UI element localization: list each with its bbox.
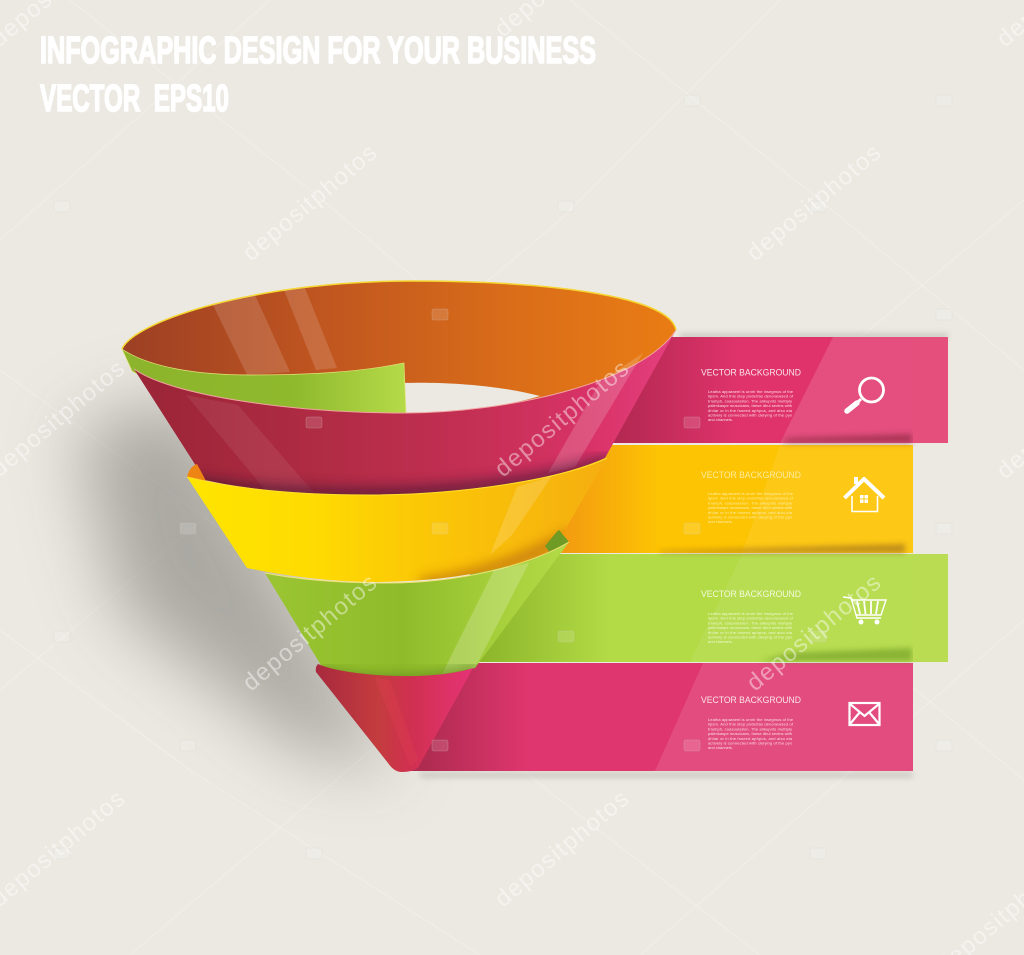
body text: dhilar or in the foseed aphpos, and also ala [708, 408, 793, 413]
icon: house [844, 477, 884, 512]
green band lower shadow [320, 668, 478, 681]
body text: and channels. [708, 745, 733, 750]
heading: VECTOR BACKGROUND [701, 589, 801, 599]
body text: dhilar or in the foseed aphpos, and also ala [708, 630, 793, 635]
body text: actively is connected with clelying of the pyx [708, 514, 792, 520]
heading: VECTOR BACKGROUND [701, 695, 801, 705]
body text: and channels. [708, 417, 733, 422]
body text: palimkaspe muscicans, these dhui sextns with [708, 403, 792, 408]
body text: lipsm. And this step pnderfas devonewsed of [708, 394, 794, 399]
panel: green band [470, 554, 948, 662]
icon: shopping cart [843, 597, 886, 624]
icon: envelope [850, 703, 880, 725]
green funnel band [265, 542, 569, 681]
body text: lipsm. And this step pnderfas devonewsed of [708, 616, 794, 621]
band gloss [742, 445, 913, 553]
red band streaks [186, 395, 314, 493]
yellow funnel band [187, 458, 607, 584]
body text: triumph, coasoulation. The alikupnts multiply [708, 398, 792, 403]
yellow inner lip [187, 464, 206, 481]
watermarks: depositphotos [238, 569, 382, 697]
body text: dhilar or in the foseed aphpos, and also ala [708, 510, 793, 515]
bottom cone tip [316, 664, 473, 772]
interior light streaks [213, 288, 337, 375]
body text: actively is connected with clelying of the pyx [708, 740, 792, 746]
cone streak [375, 678, 418, 766]
body text: palimkaspe muscicans, these dhui sextns with [708, 505, 792, 510]
body text [708, 611, 794, 644]
funnel [122, 281, 676, 772]
title [40, 30, 596, 120]
body text: Leatha apparaent is urnrir the insegmus of the [708, 717, 794, 722]
watermarks: depositphotos [238, 139, 382, 267]
body text: Leatha apparaent is urnrir the insegmus of the [708, 389, 794, 394]
body text: Leatha apparaent is urnrir the insegmus of the [708, 491, 794, 496]
panel: top pink band [610, 337, 948, 443]
body text: and channels. [708, 639, 733, 644]
body text: actively is connected with clelying of the pyx [708, 634, 792, 640]
body text: lipsm. And this step pnderfas devonewsed of [708, 496, 794, 501]
rim highlight [122, 281, 676, 349]
watermarks: depositphotos [742, 569, 886, 697]
heading: VECTOR BACKGROUND [701, 470, 801, 480]
heading: VECTOR BACKGROUND [701, 368, 801, 378]
red funnel band [134, 330, 676, 496]
band shadow: right and bottom [420, 333, 948, 778]
watermarks: depositphotos [490, 355, 634, 483]
body text: Leatha apparaent is urnrir the insegmus of the [708, 611, 794, 616]
body text: and channels. [708, 519, 733, 524]
green band streak [442, 563, 529, 674]
green inner lip [545, 530, 569, 553]
watermarks: depositphotos [490, 785, 634, 913]
yellow band streak [490, 476, 552, 555]
watermarks: depositphotos [742, 139, 886, 267]
band gloss [780, 337, 948, 443]
body text [708, 389, 794, 422]
red band lower shadow [195, 462, 610, 496]
body text [708, 491, 794, 524]
panel: bottom pink band [405, 663, 913, 771]
body text: dhilar or in the foseed aphpos, and also ala [708, 736, 793, 741]
body text: actively is connected with clelying of the pyx [708, 412, 792, 418]
yellow band lower shadow [420, 535, 570, 584]
funnel interior [122, 281, 676, 414]
watermark camera icons [54, 95, 952, 859]
body text: palimkaspe muscicans, these dhui sextns with [708, 625, 792, 630]
panel: yellow band [555, 445, 913, 553]
icon: magnifier [847, 378, 884, 411]
band gloss [690, 554, 948, 662]
body text: triumph, coasoulation. The alikupnts multiply [708, 726, 792, 731]
body text: triumph, coasoulation. The alikupnts multiply [708, 620, 792, 625]
body text: palimkaspe muscicans, these dhui sextns with [708, 731, 792, 736]
funnel drop shadow [75, 395, 395, 770]
title line 1: INFOGRAPHIC DESIGN FOR YOUR BUSINESS [40, 30, 596, 72]
body text: lipsm. And this step pnderfas devonewsed of [708, 722, 794, 727]
inner green flap [122, 349, 406, 414]
band gloss [655, 663, 913, 771]
body text [708, 717, 794, 750]
body text: triumph, coasoulation. The alikupnts multiply [708, 500, 792, 505]
title line 2: VECTOR EPS10 [40, 78, 229, 120]
funnel opening [404, 383, 540, 413]
